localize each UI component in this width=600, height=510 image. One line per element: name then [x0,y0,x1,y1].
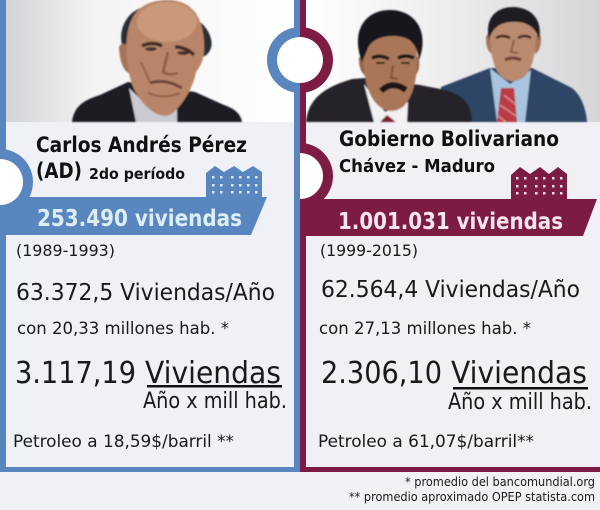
stat: per million: Viviendas [451,356,587,391]
stat: per million: Viviendas [145,356,281,391]
banner: 253.490 viviendas: 253.490 viviendas [37,206,242,232]
ring: right panel circle [267,122,333,222]
subheading: period: 2do período [89,165,185,183]
population: con 20,33 millones hab. * [17,319,229,339]
banner: 1.001.031 viviendas: 1.001.031 viviendas [338,209,563,235]
stat: per year: 63.372,5 Viviendas/Año [16,280,275,306]
heading: name: Carlos Andrés Pérez [36,133,247,157]
ring: top centre circle [267,27,333,93]
years: (1989-1993) [16,241,115,260]
heading: government: Gobierno Bolivariano [339,127,559,151]
stat: per year: 62.564,4 Viviendas/Año [321,277,580,303]
stat: per million: 2.306,10 [321,356,442,391]
oil price: Petroleo a 61,07$/barril** [318,432,534,452]
ring: left panel circle [0,149,33,215]
icon: building [206,166,262,197]
stat: per million: Año x mill hab. [143,389,287,414]
photo: Carlos Andrés Pérez [6,0,294,122]
icon: building [511,167,567,199]
years: (1999-2015) [320,241,418,260]
panel: Gobierno Bolivariano [267,0,600,472]
heading: party: (AD) [36,159,82,183]
stat: per million [321,356,592,415]
banner: 253.490 viviendas [6,197,267,235]
photo: Maduro and Chávez [306,0,600,122]
subheading: presidents: Chávez - Maduro [339,156,495,177]
panel: Carlos Andrés Pérez [0,0,300,472]
banner: 1.001.031 viviendas [306,199,597,236]
stat: per million [15,356,287,414]
stat: per million: 3.117,19 [15,356,136,391]
footnotes [349,475,595,504]
population: con 27,13 millones hab. * [319,319,531,339]
oil price: Petroleo a 18,59$/barril ** [13,432,234,452]
